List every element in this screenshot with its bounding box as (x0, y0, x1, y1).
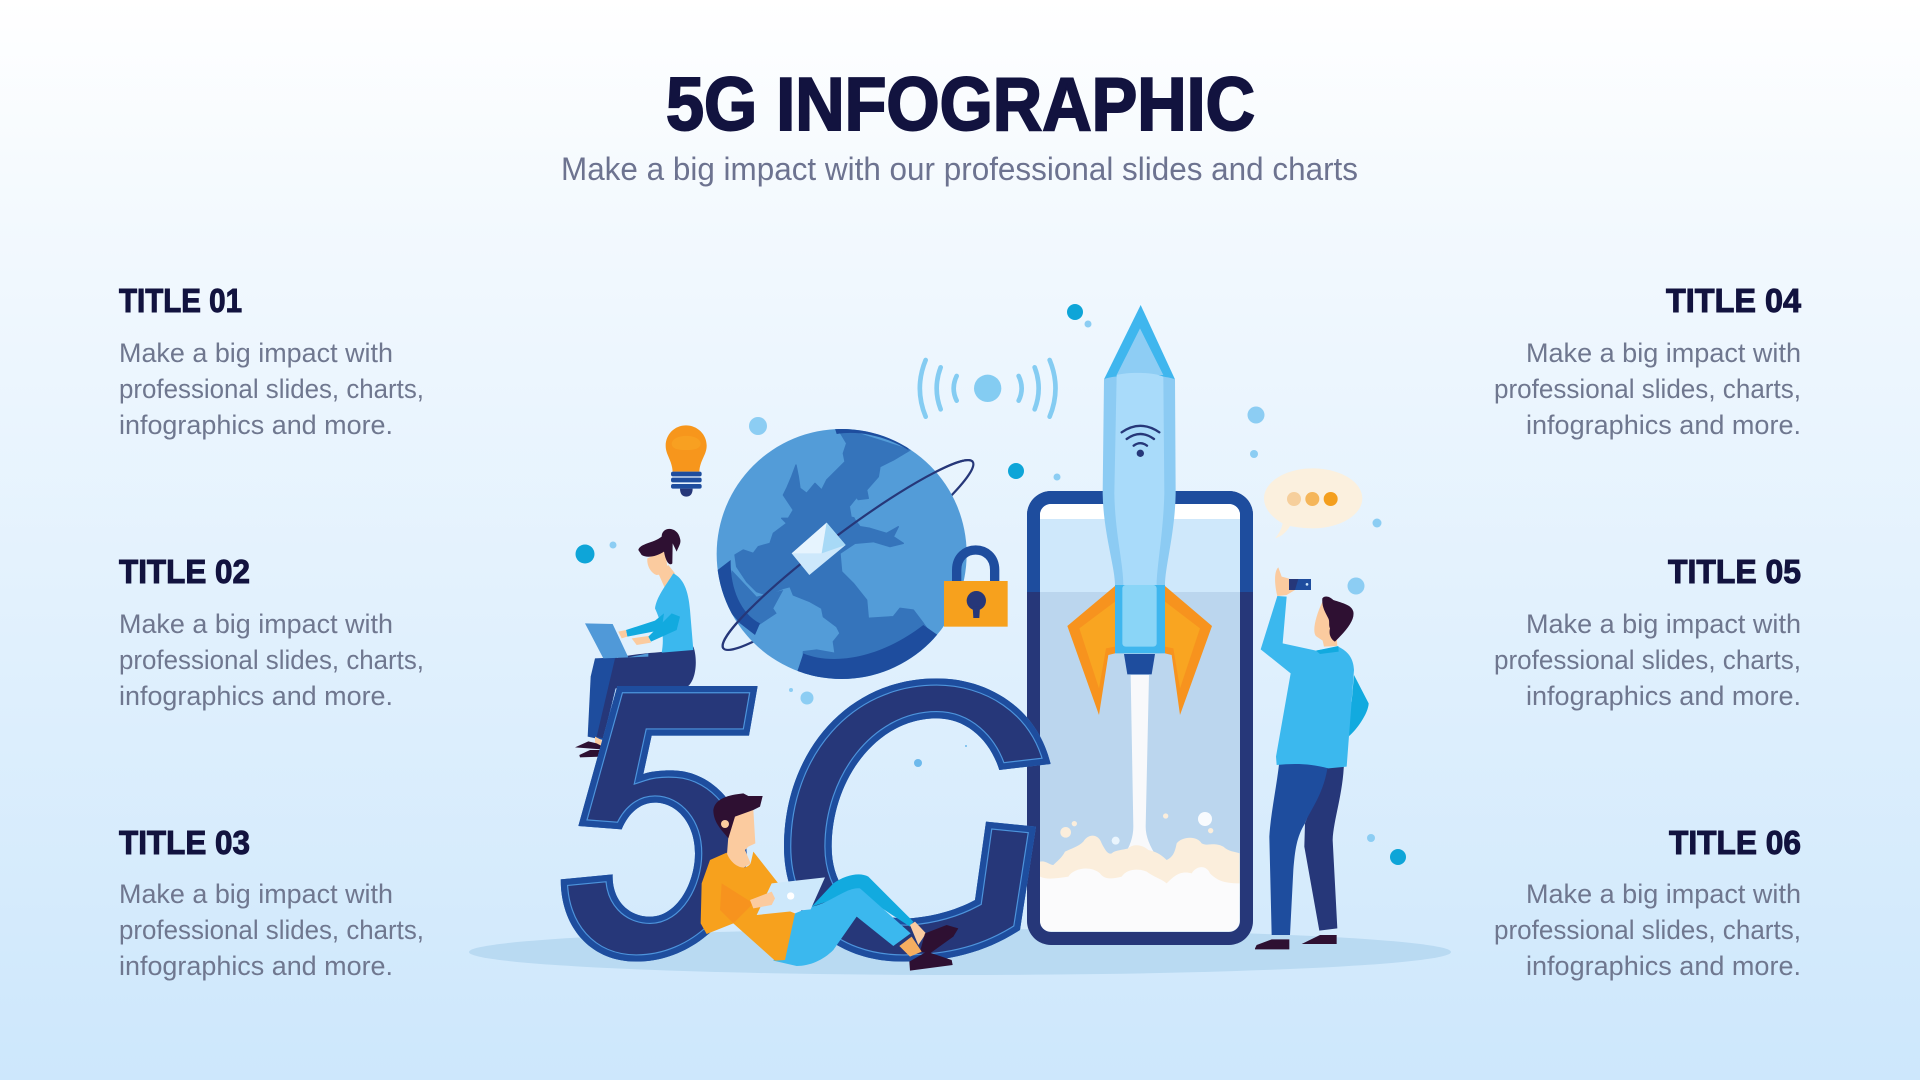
ground shadow (469, 929, 1451, 975)
panel: title 03: professional slides, charts, (119, 915, 424, 945)
panel: title 05: professional slides, charts, (1494, 645, 1801, 675)
panel: title 01 (119, 282, 424, 440)
icon: orbit back (710, 444, 986, 666)
panel: title 06 (1494, 824, 1801, 981)
panel: title 01: Make a big impact with (119, 338, 393, 368)
panel: title 02: professional slides, charts, (119, 645, 424, 675)
rocket body (1103, 373, 1176, 653)
rocket fins (1067, 586, 1212, 715)
icon: light bulb (666, 425, 707, 497)
phone (1027, 491, 1253, 945)
icon: phone camera (1289, 579, 1311, 590)
panel: title 05: infographics and more. (1526, 681, 1801, 711)
panel: title 04: infographics and more. (1526, 410, 1801, 440)
hand (1275, 567, 1295, 596)
title: 5G INFOGRAPHIC (666, 62, 1255, 146)
subtitle: Make a big impact with our professional slides and charts (561, 151, 1358, 187)
panel: title 02: TITLE 02 (119, 553, 250, 590)
speech bubble (1264, 468, 1362, 538)
panel: title 02: Make a big impact with (119, 609, 393, 639)
big 5G letters (561, 678, 1051, 962)
panel: title 05: TITLE 05 (1668, 553, 1801, 590)
head and neck (1314, 600, 1337, 647)
panel: title 06: infographics and more. (1526, 951, 1801, 981)
panel: title 04: TITLE 04 (1666, 282, 1802, 319)
panel: title 04: professional slides, charts, (1494, 374, 1801, 404)
panel: title 06: professional slides, charts, (1494, 915, 1801, 945)
panel: title 06: Make a big impact with (1526, 879, 1801, 909)
panel: title 03: infographics and more. (119, 951, 393, 981)
panel: title 02: infographics and more. (119, 681, 393, 711)
person: man taking a photo (1255, 567, 1369, 949)
panel: title 03: TITLE 03 (119, 824, 250, 861)
panel: title 01: infographics and more. (119, 410, 393, 440)
shoes (1255, 935, 1337, 949)
globe (713, 423, 967, 687)
panel: title 04: Make a big impact with (1526, 338, 1801, 368)
shirt (1261, 596, 1354, 768)
letter 5 (561, 686, 758, 962)
person: man reclining with tablet (701, 793, 958, 971)
panel: title 01: TITLE 01 (119, 282, 242, 319)
rocket exhaust and clouds (1040, 675, 1240, 932)
person: woman with laptop (575, 529, 696, 757)
hair (1322, 597, 1354, 642)
panel: title 01: professional slides, charts, (119, 374, 424, 404)
panel: title 02 (119, 553, 424, 711)
icon: signal waves (920, 360, 1055, 417)
rocket (1067, 305, 1212, 715)
panel: title 04 (1494, 282, 1802, 440)
icon: padlock (944, 550, 1008, 627)
panel: title 03: Make a big impact with (119, 879, 393, 909)
decorative dots (576, 304, 1406, 865)
trousers (1269, 762, 1344, 935)
icon: envelope (792, 523, 846, 575)
back arm (1347, 675, 1369, 737)
rocket nozzle (1124, 654, 1155, 674)
panel: title 05: Make a big impact with (1526, 609, 1801, 639)
orbit front (723, 460, 973, 648)
panel: title 05 (1494, 553, 1801, 711)
panel: title 03 (119, 824, 424, 981)
panel: title 06: TITLE 06 (1669, 824, 1801, 861)
icon: wifi (1122, 426, 1159, 457)
rocket nose cone (1104, 305, 1175, 379)
letter G (784, 678, 1051, 962)
